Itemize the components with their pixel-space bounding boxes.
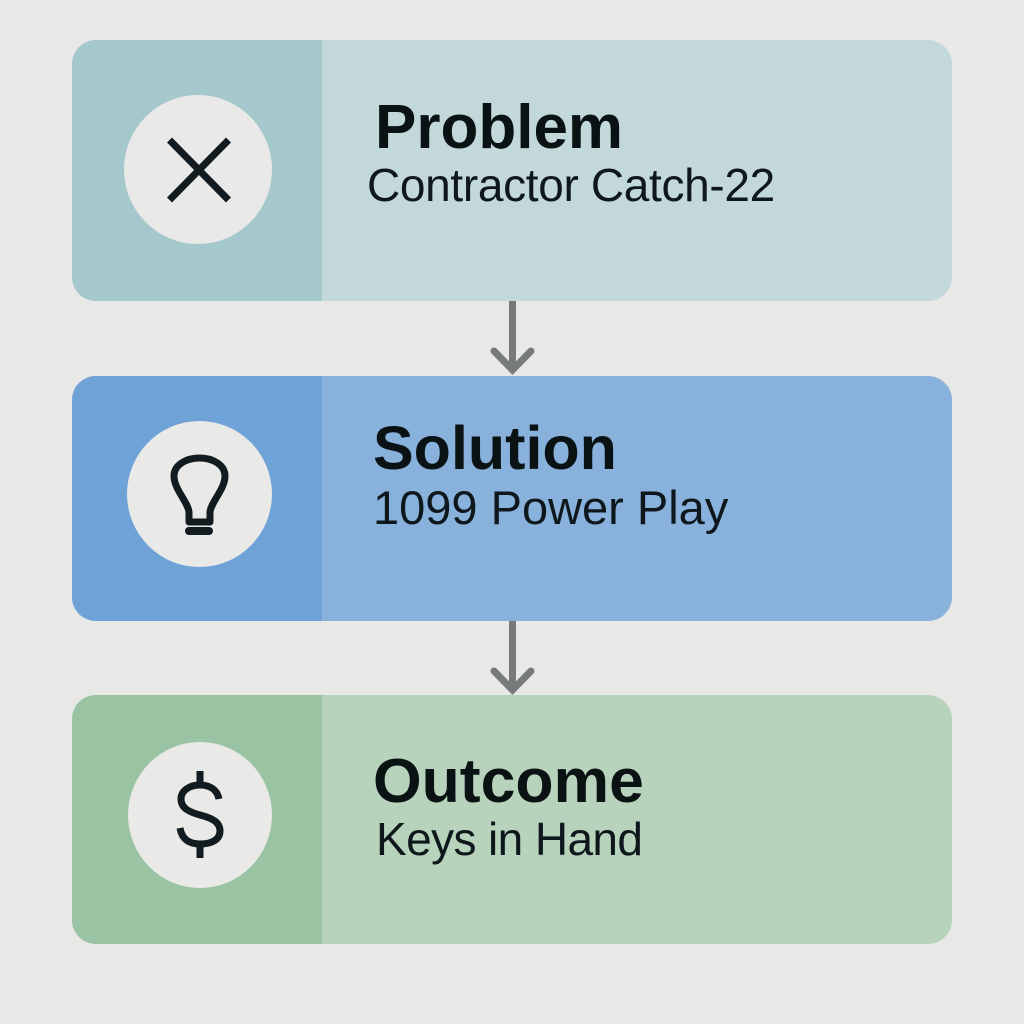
- outcome icon column: [72, 695, 322, 944]
- panel: outcome: [72, 695, 952, 944]
- panel: solution: [72, 376, 952, 621]
- icon: dollar sign: [176, 771, 224, 858]
- icon: X mark: [167, 138, 231, 202]
- text: 1099 Power Play: 1099 Power Play: [373, 481, 728, 534]
- text: Contractor Catch-22: Contractor Catch-22: [367, 159, 775, 211]
- arrow: problem to solution: [490, 301, 534, 375]
- heading: Problem: Problem: [375, 93, 623, 162]
- icon circle: outcome: [128, 742, 272, 888]
- heading: Outcome: Outcome: [373, 746, 644, 816]
- icon: light bulb: [170, 454, 228, 535]
- problem icon column: [72, 40, 322, 301]
- text: Keys in Hand: Keys in Hand: [376, 813, 642, 865]
- panel: problem: [72, 40, 952, 301]
- arrow: solution to outcome: [490, 621, 534, 695]
- solution icon column: [72, 376, 322, 621]
- icon circle: solution: [127, 421, 272, 567]
- icon circle: problem: [124, 95, 272, 244]
- heading: Solution: Solution: [373, 414, 617, 482]
